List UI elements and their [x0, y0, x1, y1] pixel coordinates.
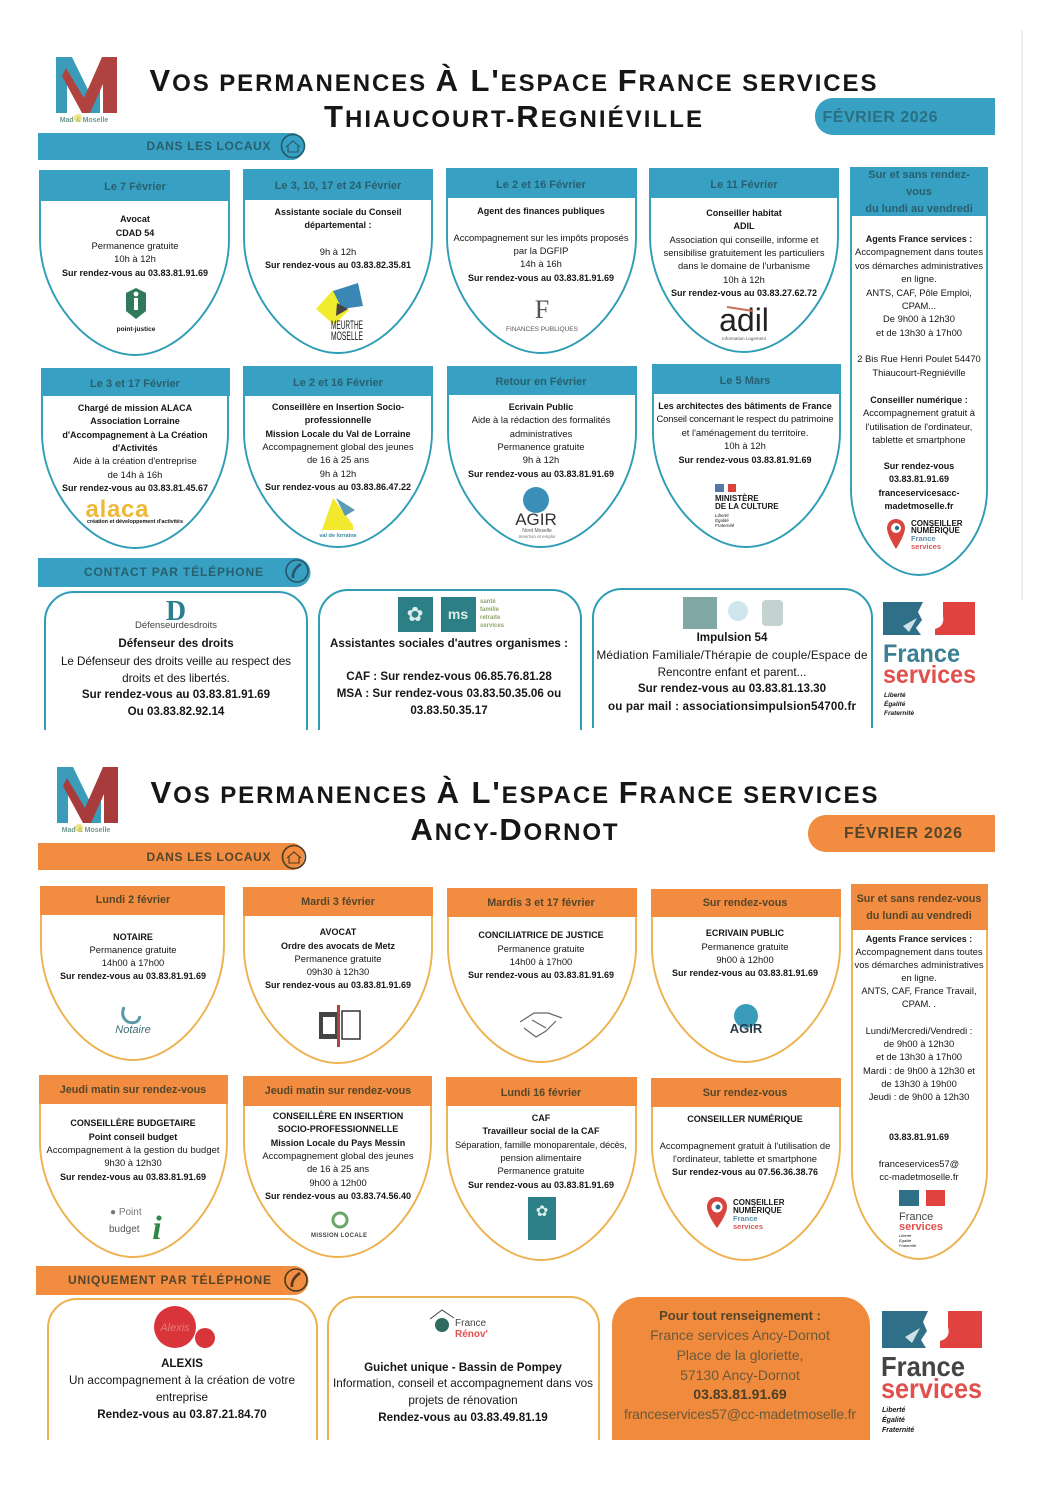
- card: Le 3, 10, 17 et 24 Février: départemental :: [304, 220, 372, 230]
- card: Sur et sans rendez-vous (agents France services): du lundi au vendredi: [866, 910, 972, 922]
- logo: Mad et Moselle: [56, 57, 117, 124]
- box: Pour tout renseignement: 57130 Ancy-Dornot: [680, 1367, 800, 1383]
- box: Alexis: entreprise: [156, 1391, 208, 1404]
- card: Le 2 et 16 Février, Mission Locale: [243, 366, 433, 547]
- card: Sur rendez-vous, conseiller numérique: France: [733, 1214, 758, 1223]
- card: Sur et sans rendez-vous (agents France services): De 9h00 à 12h30: [883, 313, 955, 324]
- box: Défenseur des droits: Défenseurdesdroits: [135, 620, 217, 631]
- card: Le 2 et 16 Février, Mission Locale: 9h à 12h: [320, 468, 356, 479]
- card: Le 2 et 16 Février: Sur rendez-vous au 03.83.81.91.69: [468, 273, 614, 283]
- card: Sur rendez-vous, conseiller numérique: Sur rendez-vous: [703, 1087, 787, 1099]
- box: France Rénov: Information, conseil et accompagnement dans vos: [333, 1377, 593, 1390]
- card: Sur et sans rendez-vous (agents France services): Fraternité: [899, 1243, 917, 1248]
- card: Le 3 et 17 Février: Association Lorraine: [90, 416, 180, 426]
- card: Sur et sans rendez-vous (agents France services): Agents France services :: [866, 234, 972, 244]
- panel: Thiaucourt-Regniéville section: [38, 57, 995, 730]
- card: Lundi 2 février, notaire: Notaire: [115, 1024, 151, 1036]
- card: Sur et sans rendez-vous (agents France services): 03.83.81.91.69: [889, 1132, 949, 1142]
- card: Sur et sans rendez-vous (agents France services): 2 Bis Rue Henri Poulet 54470: [857, 353, 981, 364]
- card: Le 11 Février: adil: [719, 302, 769, 338]
- card: Le 5 Mars: Sur rendez-vous 03.83.81.91.69: [678, 455, 812, 465]
- card: Le 2 et 16 Février, Mission Locale: Mission Locale du Val de Lorraine: [265, 429, 411, 439]
- card: Le 2 et 16 Février, Mission Locale: Le 2 et 16 Février: [293, 377, 384, 389]
- card: Jeudi matin, conseillère budgétaire: ● Point: [110, 1207, 142, 1218]
- box: Impulsion 54: Rencontre enfant et parent...: [658, 666, 806, 679]
- card: Le 5 Mars: [652, 364, 841, 547]
- section bar: Dans les locaux: [38, 133, 304, 160]
- title: ANCY-DORNOT: [410, 812, 618, 847]
- card: Jeudi matin, conseillère insertion: Mission Locale du Pays Messin: [271, 1138, 405, 1148]
- card: Jeudi matin, conseillère budgétaire: Point conseil budget: [89, 1132, 177, 1142]
- card: Sur et sans rendez-vous (agents France services): Conseiller numérique :: [870, 395, 968, 405]
- card: Mardis 3 et 17 février, conciliatrice: Sur rendez-vous au 03.83.81.91.69: [468, 970, 614, 980]
- card: Sur et sans rendez-vous (agents France services): franceservicesacc-: [878, 488, 960, 498]
- card: Lundi 16 février, CAF: Sur rendez-vous au 03.83.81.91.69: [468, 1180, 614, 1190]
- section bar: Dans les locaux: DANS LES LOCAUX: [146, 139, 272, 153]
- box: Pour tout renseignement: France services Ancy-Dornot: [650, 1327, 830, 1343]
- box: Alexis: [48, 1299, 317, 1440]
- card: Lundi 2 février, notaire: NOTAIRE: [113, 932, 153, 942]
- card: Retour en Février, écrivain public: Retour en Février: [495, 376, 587, 388]
- title: VOS PERMANENCES À L'ESPACE FRANCE SERVICES: [150, 63, 876, 98]
- card: Lundi 2 février, notaire: Permanence gratuite: [89, 944, 177, 955]
- card: Le 3 et 17 Février: [41, 368, 230, 548]
- card: Sur et sans rendez-vous (agents France services): NUMÉRIQUE: [911, 526, 961, 535]
- card: Le 5 Mars: Liberté: [715, 513, 729, 518]
- card: Retour en Février, écrivain public: 9h à 12h: [523, 454, 559, 465]
- card: Retour en Février, écrivain public: Sur rendez-vous au 03.83.81.91.69: [468, 469, 614, 479]
- card: Sur et sans rendez-vous (agents France services): cc-madetmoselle.fr: [879, 1171, 959, 1182]
- card: Le 3 et 17 Février: d'Activités: [112, 443, 158, 453]
- logo: France services: [883, 602, 976, 717]
- box: France Rénov: Rendez-vous au 03.83.49.81.19: [378, 1411, 548, 1424]
- card: Lundi 16 février, CAF: Lundi 16 février: [501, 1087, 582, 1099]
- card: Le 11 Février: Le 11 Février: [710, 179, 778, 191]
- card: Sur et sans rendez-vous (agents France services): Sur et sans rendez-: [868, 169, 970, 181]
- box: Assistantes sociales: famille: [480, 607, 500, 613]
- card: Le 3 et 17 Février: alaca: [86, 496, 149, 523]
- card: Le 7 Février: Permanence gratuite: [91, 240, 179, 251]
- card: Sur rendez-vous, conseiller numérique: Sur rendez-vous au 07.56.36.38.76: [672, 1167, 818, 1177]
- card: Le 2 et 16 Février: [446, 168, 637, 353]
- card: Le 3 et 17 Février: Chargé de mission ALACA: [78, 403, 193, 413]
- card: Jeudi matin, conseillère insertion: Sur rendez-vous au 03.83.74.56.40: [265, 1191, 411, 1201]
- date pill: Février 2026: FÉVRIER 2026: [822, 107, 938, 126]
- card: Le 5 Mars: 10h à 12h: [724, 440, 766, 451]
- card: Retour en Février, écrivain public: Permanence gratuite: [497, 441, 585, 452]
- card: Sur rendez-vous, écrivain public: [651, 889, 841, 1062]
- card: Jeudi matin, conseillère insertion: [243, 1076, 432, 1257]
- section bar: Dans les locaux: [38, 843, 306, 870]
- title: VOS PERMANENCES À L'ESPACE FRANCE SERVICES: [150, 775, 878, 810]
- card: Le 3 et 17 Février: Aide à la création d'entreprise: [73, 455, 197, 466]
- card: Jeudi matin, conseillère insertion: MISSION LOCALE: [311, 1233, 367, 1239]
- card: Retour en Février, écrivain public: Insertion et emploi: [519, 534, 555, 539]
- card: Sur rendez-vous, conseiller numérique: l'ordinateur, tablette et smartphone: [673, 1153, 817, 1164]
- card: Le 2 et 16 Février: FINANCES PUBLIQUES: [506, 326, 579, 333]
- card: Le 3, 10, 17 et 24 Février: [243, 169, 433, 353]
- box: Impulsion 54: [593, 589, 872, 728]
- card: Sur et sans rendez-vous (agents France services): Agents France services :: [866, 934, 972, 944]
- card: Sur et sans rendez-vous (agents France services): [851, 884, 988, 1259]
- card: Le 5 Mars: Les architectes des bâtiments de France: [658, 401, 832, 411]
- card: Le 3, 10, 17 et 24 Février: MOSELLE: [331, 329, 363, 343]
- logo: France services: Liberté: [882, 1407, 905, 1414]
- card: Le 5 Mars: MINISTÈRE: [715, 494, 759, 503]
- card: Le 11 Février: Information Logement: [722, 336, 767, 341]
- card: Sur rendez-vous, écrivain public: Permanence gratuite: [701, 941, 789, 952]
- card: Lundi 16 février, CAF: pension alimentaire: [500, 1152, 582, 1163]
- card: Sur et sans rendez-vous (agents France services): CONSEILLER: [911, 519, 963, 528]
- box: Pour tout renseignement: Place de la gloriette,: [677, 1347, 803, 1363]
- logo: France services: Égalité: [882, 1415, 905, 1424]
- card: Sur et sans rendez-vous (agents France services): tablette et smartphone: [872, 434, 966, 445]
- logo: France services: Fraternité: [882, 1427, 914, 1434]
- card: Sur rendez-vous, conseiller numérique: Accompagnement gratuit à l'utilisation de: [660, 1140, 830, 1151]
- box: Impulsion 54: ou par mail : associationsimpulsion54700.fr: [608, 700, 856, 713]
- card: Mardi 3 février, avocat: 09h30 à 12h30: [307, 966, 369, 977]
- box: Assistantes sociales: [319, 590, 581, 730]
- section bar: Uniquement par téléphone: [36, 1266, 308, 1295]
- card: Le 11 Février: dans le domaine de l'urbanisme: [678, 260, 810, 271]
- card: Sur rendez-vous, écrivain public: AGIR: [730, 1021, 763, 1036]
- card: Retour en Février, écrivain public: Nord Moselle: [522, 528, 552, 534]
- card: Sur et sans rendez-vous (agents France services): France: [899, 1211, 933, 1223]
- box: Défenseur des droits: Sur rendez-vous au 03.83.81.91.69: [82, 688, 271, 701]
- card: Le 3 et 17 Février: création et développement d'activités: [87, 519, 183, 525]
- card: Sur rendez-vous, conseiller numérique: services: [733, 1222, 763, 1231]
- card: Mardi 3 février, avocat: Permanence gratuite: [294, 953, 382, 964]
- box: Défenseur des droits: Le Défenseur des droits veille au respect des: [61, 655, 291, 668]
- card: Le 11 Février: Conseiller habitat: [706, 208, 782, 218]
- card: Lundi 2 février, notaire: [40, 886, 225, 1060]
- card: Le 11 Février: sensibilise gratuitement les particuliers: [664, 247, 825, 258]
- card: Sur et sans rendez-vous (agents France services): vous: [906, 186, 932, 198]
- box: Assistantes sociales: MSA : Sur rendez-vous 03.83.50.35.06 ou: [337, 687, 561, 700]
- card: Retour en Février, écrivain public: Aide à la rédaction des formalités: [472, 414, 611, 425]
- title: THIAUCOURT-REGNIÉVILLE: [324, 99, 702, 134]
- box: Défenseur des droits: Défenseur des droits: [118, 637, 234, 650]
- card: Sur et sans rendez-vous (agents France services): vos démarches administratives: [855, 260, 983, 271]
- card: Le 3, 10, 17 et 24 Février: 9h à 12h: [320, 246, 356, 257]
- box: Défenseur des droits: D: [166, 596, 186, 627]
- card: Sur et sans rendez-vous (agents France services): Accompagnement dans toutes: [856, 946, 983, 957]
- card: Sur et sans rendez-vous (agents France services): Accompagnement gratuit à: [863, 407, 976, 418]
- card: Lundi 2 février, notaire: Sur rendez-vous au 03.83.81.91.69: [60, 971, 206, 981]
- logo: France services: services: [883, 661, 976, 689]
- card: Le 11 Février: [649, 168, 839, 352]
- card: Le 3 et 17 Février: Sur rendez-vous au 03.83.81.45.67: [62, 483, 208, 493]
- box: Impulsion 54: Impulsion 54: [697, 631, 768, 644]
- card: Sur et sans rendez-vous (agents France services): CPAM...: [902, 300, 936, 311]
- card: Le 3, 10, 17 et 24 Février: Assistante sociale du Conseil: [274, 207, 402, 217]
- panel: Ancy-Dornot section: [36, 767, 995, 1440]
- card: Lundi 16 février, CAF: Permanence gratuite: [497, 1165, 585, 1176]
- card: Le 2 et 16 Février: par la DGFIP: [514, 245, 568, 256]
- box: Assistantes sociales: 03.83.50.35.17: [410, 704, 488, 717]
- card: Sur et sans rendez-vous (agents France services): l'utilisation de l'ordinateur,: [866, 421, 972, 432]
- box: France Rénov: France: [455, 1318, 487, 1329]
- logo: France services: France: [883, 640, 960, 668]
- logo: Mad et Moselle: Mad & Moselle: [60, 117, 108, 124]
- card: Lundi 2 février, notaire: 14h00 à 17h00: [102, 957, 164, 968]
- card: Mardis 3 et 17 février, conciliatrice: CONCILIATRICE DE JUSTICE: [478, 930, 604, 940]
- box: Pour tout renseignement: franceservices57@cc-madetmoselle.fr: [624, 1406, 856, 1422]
- box: Alexis: Rendez-vous au 03.87.21.84.70: [97, 1408, 267, 1421]
- card: Sur et sans rendez-vous (agents France services): et de 13h30 à 17h00: [876, 1051, 962, 1062]
- card: Lundi 16 février, CAF: Séparation, famille monoparentale, décès,: [455, 1139, 627, 1150]
- card: Mardis 3 et 17 février, conciliatrice: 14h00 à 17h00: [510, 956, 572, 967]
- card: Sur rendez-vous, écrivain public: 9h00 à 12h00: [716, 954, 774, 965]
- card: Retour en Février, écrivain public: AGIR: [515, 510, 557, 529]
- card: Le 5 Mars: Conseil concernant le respect du patrimoine: [656, 413, 834, 424]
- card: Mardi 3 février, avocat: Mardi 3 février: [301, 896, 376, 908]
- card: Sur et sans rendez-vous (agents France services): services: [899, 1221, 943, 1233]
- box: Assistantes sociales: Assistantes sociales d'autres organismes :: [330, 637, 568, 650]
- card: Jeudi matin, conseillère insertion: Accompagnement global des jeunes: [262, 1150, 414, 1161]
- card: Retour en Février, écrivain public: [447, 366, 637, 547]
- box: Alexis: Un accompagnement à la création de votre: [69, 1374, 295, 1387]
- card: Mardis 3 et 17 février, conciliatrice: Mardis 3 et 17 février: [487, 897, 596, 909]
- card: Le 2 et 16 Février: 14h à 16h: [520, 258, 562, 269]
- card: Le 7 Février: Sur rendez-vous au 03.83.81.91.69: [62, 268, 208, 278]
- box: Défenseur des droits: [45, 592, 307, 730]
- card: Le 7 Février: Le 7 Février: [104, 181, 167, 193]
- card: Le 2 et 16 Février, Mission Locale: val de lorraine: [319, 533, 357, 539]
- card: Jeudi matin, conseillère insertion: SOCIO-PROFESSIONNELLE: [278, 1124, 398, 1134]
- card: Jeudi matin, conseillère budgétaire: budget: [109, 1224, 140, 1235]
- card: Sur et sans rendez-vous (agents France services): et de 13h30 à 17h00: [876, 327, 962, 338]
- card: Sur rendez-vous, conseiller numérique: NUMÉRIQUE: [733, 1206, 783, 1215]
- title: [150, 775, 878, 847]
- card: Jeudi matin, conseillère insertion: 9h00 à 12h00: [309, 1177, 367, 1188]
- card: Le 2 et 16 Février: F: [535, 295, 549, 324]
- card: Le 7 Février: 10h à 12h: [114, 253, 156, 264]
- box: Assistantes sociales: services: [480, 623, 505, 629]
- card: Jeudi matin, conseillère insertion: de 16 à 25 ans: [307, 1163, 369, 1174]
- card: Le 2 et 16 Février, Mission Locale: Accompagnement global des jeunes: [262, 441, 414, 452]
- card: Sur et sans rendez-vous (agents France services): ANTS, CAF, France Travail,: [861, 985, 977, 996]
- section bar: Contact par téléphone: [38, 558, 310, 587]
- card: Le 3 et 17 Février: Le 3 et 17 Février: [90, 378, 181, 390]
- card: Le 2 et 16 Février, Mission Locale: de 16 à 25 ans: [307, 454, 369, 465]
- card: Le 5 Mars: DE LA CULTURE: [715, 502, 779, 511]
- card: Sur et sans rendez-vous (agents France services): madetmoselle.fr: [884, 501, 954, 511]
- card: Jeudi matin, conseillère budgétaire: Jeudi matin sur rendez-vous: [60, 1084, 206, 1096]
- card: Sur et sans rendez-vous (agents France services): ANTS, CAF, Pôle Emploi,: [866, 287, 972, 298]
- card: Le 3 et 17 Février: d'Accompagnement à La Création: [62, 430, 208, 440]
- card: Le 11 Février: ADIL: [734, 221, 755, 231]
- card: Le 3, 10, 17 et 24 Février: MEURTHE: [331, 318, 363, 332]
- box: France Rénov: projets de rénovation: [408, 1394, 518, 1407]
- card: Sur et sans rendez-vous (agents France services): 03.83.81.91.69: [889, 474, 949, 484]
- card: Sur et sans rendez-vous (agents France services): CPAM. .: [902, 998, 936, 1009]
- card: Mardi 3 février, avocat: Ordre des avocats de Metz: [281, 941, 396, 951]
- logo: France services: France: [881, 1351, 965, 1382]
- box: Assistantes sociales: CAF : Sur rendez-vous 06.85.76.81.28: [346, 670, 552, 683]
- card: Sur rendez-vous, conseiller numérique: [651, 1078, 841, 1260]
- card: Le 2 et 16 Février, Mission Locale: Sur rendez-vous au 03.83.86.47.22: [265, 482, 411, 492]
- logo: France services: [881, 1311, 982, 1434]
- box: Alexis: ALEXIS: [161, 1357, 203, 1370]
- card: Mardi 3 février, avocat: Sur rendez-vous au 03.83.81.91.69: [265, 980, 411, 990]
- card: Lundi 16 février, CAF: ✿: [536, 1203, 548, 1220]
- card: Jeudi matin, conseillère budgétaire: CONSEILLÈRE BUDGETAIRE: [70, 1118, 196, 1128]
- card: Sur et sans rendez-vous (agents France services): Accompagnement dans toutes: [855, 246, 983, 257]
- card: Sur et sans rendez-vous (agents France services): Sur rendez-vous: [884, 461, 954, 471]
- card: Le 2 et 16 Février: Accompagnement sur les impôts proposés: [454, 232, 629, 243]
- card: Sur et sans rendez-vous (agents France services): en ligne.: [901, 972, 937, 983]
- card: Le 2 et 16 Février, Mission Locale: Conseillère en Insertion Socio-: [272, 402, 404, 412]
- card: Retour en Février, écrivain public: administratives: [510, 428, 573, 439]
- card: Sur et sans rendez-vous (agents France services): [850, 167, 988, 575]
- title: [150, 63, 876, 134]
- box: France Rénov: Guichet unique - Bassin de Pompey: [364, 1361, 562, 1374]
- box: France Rénov: [328, 1297, 599, 1440]
- box: Assistantes sociales: ✿: [407, 604, 423, 626]
- card: Sur rendez-vous, conseiller numérique: CONSEILLER: [733, 1198, 785, 1207]
- card: Le 7 Février: CDAD 54: [116, 228, 154, 238]
- card: Lundi 2 février, notaire: Lundi 2 février: [96, 894, 171, 906]
- card: Le 3 et 17 Février: de 14h à 16h: [108, 469, 162, 480]
- card: Sur et sans rendez-vous (agents France services): de 13h30 à 19h00: [881, 1078, 957, 1089]
- box: Alexis: Alexis: [159, 1322, 190, 1334]
- card: Mardi 3 février, avocat: AVOCAT: [320, 927, 357, 937]
- card: Le 11 Février: Association qui conseille, informe et: [669, 234, 819, 245]
- section bar: Contact par téléphone: CONTACT PAR TÉLÉPHONE: [84, 564, 264, 579]
- card: Sur et sans rendez-vous (agents France services): Égalité: [899, 1238, 912, 1243]
- card: Retour en Février, écrivain public: Ecrivain Public: [509, 402, 573, 412]
- card: Sur et sans rendez-vous (agents France services): en ligne.: [901, 273, 937, 284]
- card: Sur et sans rendez-vous (agents France services): Lundi/Mercredi/Vendredi :: [866, 1025, 972, 1036]
- card: Le 3, 10, 17 et 24 Février: Le 3, 10, 17 et 24 Février: [275, 180, 402, 192]
- card: Le 3, 10, 17 et 24 Février: Sur rendez-vous au 03.83.82.35.81: [265, 260, 411, 270]
- card: Le 11 Février: Sur rendez-vous au 03.83.27.62.72: [671, 288, 817, 298]
- card: Mardis 3 et 17 février, conciliatrice: [447, 888, 637, 1062]
- box: Défenseur des droits: droits et des libertés.: [122, 672, 230, 685]
- card: Sur et sans rendez-vous (agents France services): Jeudi : de 9h00 à 12h30: [869, 1091, 969, 1102]
- card: Jeudi matin, conseillère budgétaire: Sur rendez-vous au 03.83.81.91.69: [60, 1172, 206, 1182]
- card: Le 11 Février: 10h à 12h: [723, 274, 765, 285]
- date pill: Février 2026: FÉVRIER 2026: [844, 823, 962, 842]
- card: Sur et sans rendez-vous (agents France services): Mardi : de 9h00 à 12h30 et: [863, 1065, 975, 1076]
- card: Sur et sans rendez-vous (agents France services): France: [911, 534, 936, 543]
- section bar: Uniquement par téléphone: UNIQUEMENT PAR TÉLÉPHONE: [68, 1272, 272, 1287]
- logo: France services: Fraternité: [884, 710, 914, 717]
- card: Sur rendez-vous, écrivain public: Sur rendez-vous au 03.83.81.91.69: [672, 968, 818, 978]
- date pill: Février 2026: [815, 98, 995, 135]
- card: Sur rendez-vous, écrivain public: Sur rendez-vous: [703, 897, 787, 909]
- box: Pour tout renseignement: 03.83.81.91.69: [693, 1386, 787, 1402]
- card: Le 5 Mars: Égalité: [715, 517, 729, 523]
- card: Jeudi matin, conseillère budgétaire: [39, 1075, 228, 1257]
- card: Sur et sans rendez-vous (agents France services): Liberté: [899, 1233, 912, 1238]
- logo: France services: Liberté: [884, 692, 906, 699]
- logo: Mad et Moselle: [57, 767, 118, 834]
- card: Sur et sans rendez-vous (agents France services): services: [911, 542, 941, 551]
- logo: France services: services: [881, 1373, 982, 1404]
- card: Le 2 et 16 Février, Mission Locale: professionnelle: [305, 415, 371, 425]
- box: Pour tout renseignement: Pour tout renseignement :: [659, 1308, 821, 1323]
- card: Lundi 16 février, CAF: [446, 1077, 637, 1260]
- card: Jeudi matin, conseillère budgétaire: Accompagnement à la gestion du budget: [46, 1144, 220, 1155]
- card: Le 5 Mars: et l'aménagement du territoire.: [682, 427, 808, 438]
- card: Jeudi matin, conseillère budgétaire: 9h30 à 12h30: [104, 1157, 162, 1168]
- card: Sur et sans rendez-vous (agents France services): du lundi au vendredi: [865, 203, 973, 215]
- card: Sur et sans rendez-vous (agents France services): de 9h00 à 12h30: [884, 1038, 954, 1049]
- card: Lundi 16 février, CAF: CAF: [532, 1113, 551, 1123]
- box: Pour tout renseignement: [612, 1297, 870, 1440]
- card: Le 2 et 16 Février: Agent des finances publiques: [477, 206, 605, 216]
- card: Le 5 Mars: Le 5 Mars: [720, 375, 770, 387]
- card: Mardi 3 février, avocat: [243, 887, 433, 1063]
- card: Sur et sans rendez-vous (agents France services): Thiaucourt-Regniéville: [872, 367, 966, 378]
- card: Jeudi matin, conseillère budgétaire: i: [152, 1210, 162, 1247]
- card: Le 2 et 16 Février: Le 2 et 16 Février: [496, 179, 587, 191]
- box: Assistantes sociales: santé: [480, 599, 496, 605]
- card: Lundi 16 février, CAF: Travailleur social de la CAF: [482, 1126, 600, 1136]
- logo: Mad et Moselle: Mad & Moselle: [62, 827, 110, 834]
- box: Assistantes sociales: ms: [448, 606, 468, 622]
- card: Sur rendez-vous, conseiller numérique: CONSEILLER NUMÉRIQUE: [687, 1114, 803, 1124]
- box: Impulsion 54: Médiation Familiale/Thérapie de couple/Espace de: [596, 649, 868, 662]
- card: Le 7 Février: [39, 170, 230, 355]
- box: France Rénov: Rénov': [455, 1329, 488, 1340]
- section bar: Dans les locaux: DANS LES LOCAUX: [146, 850, 272, 864]
- box: Impulsion 54: Sur rendez-vous au 03.83.81.13.30: [638, 682, 826, 695]
- card: Jeudi matin, conseillère insertion: CONSEILLÈRE EN INSERTION: [273, 1111, 403, 1121]
- card: Le 5 Mars: Fraternité: [715, 523, 735, 528]
- card: Sur et sans rendez-vous (agents France services): Sur et sans rendez-vous: [857, 893, 981, 905]
- box: Défenseur des droits: Ou 03.83.82.92.14: [128, 705, 225, 718]
- logo: France services: Égalité: [884, 699, 906, 708]
- card: Jeudi matin, conseillère insertion: Jeudi matin sur rendez-vous: [265, 1085, 411, 1097]
- date pill: Février 2026: [808, 815, 995, 852]
- card: Le 7 Février: point-justice: [117, 326, 156, 333]
- card: Sur et sans rendez-vous (agents France services): franceservices57@: [879, 1158, 959, 1169]
- box: Assistantes sociales: retraite: [480, 615, 501, 621]
- card: Le 7 Février: Avocat: [120, 214, 150, 224]
- card: Sur rendez-vous, écrivain public: ECRIVAIN PUBLIC: [706, 928, 785, 938]
- card: Mardis 3 et 17 février, conciliatrice: Permanence gratuite: [497, 943, 585, 954]
- card: Sur et sans rendez-vous (agents France services): vos démarches administratives: [854, 959, 984, 970]
